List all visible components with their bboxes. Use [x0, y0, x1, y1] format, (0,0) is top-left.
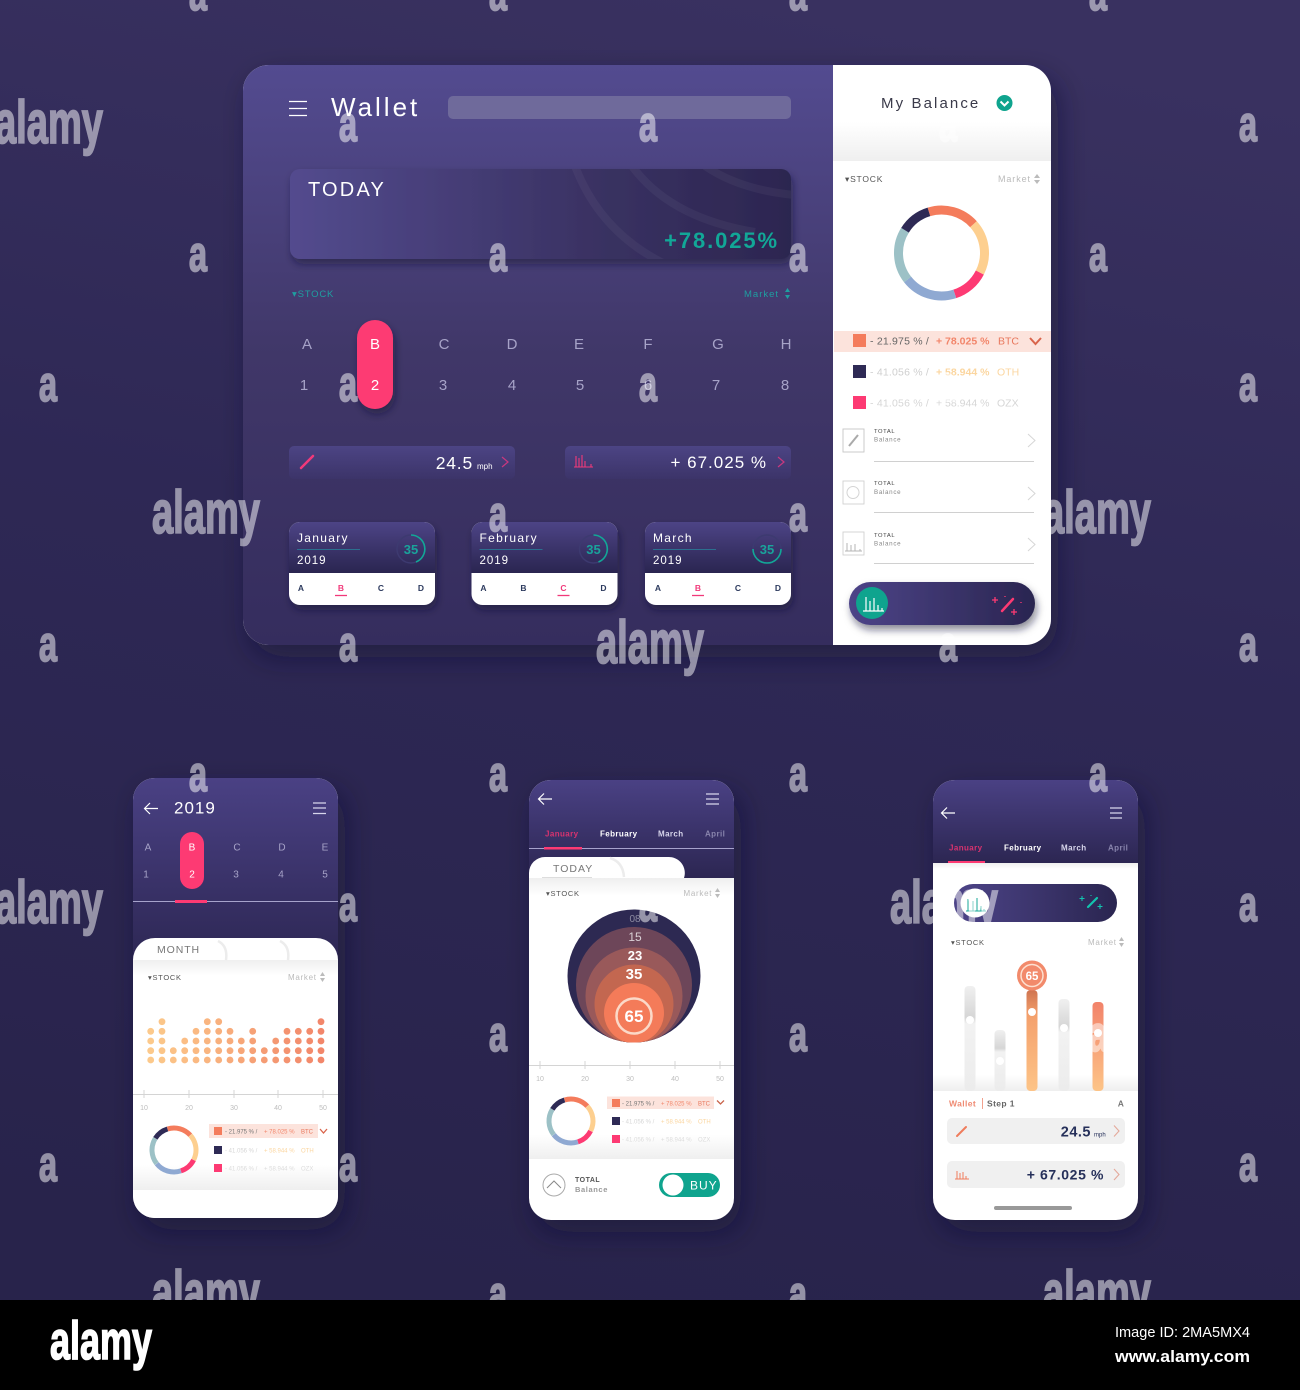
radial stacked chart: 35 — [626, 966, 642, 983]
watermark overlay: alamy — [152, 1259, 260, 1326]
watermark overlay: a — [789, 486, 808, 542]
month card: March: 35 — [760, 542, 774, 557]
tab divider — [529, 848, 734, 850]
tab active marker — [175, 900, 207, 903]
image id: Image ID: 2MA5MX4 — [1115, 1324, 1250, 1341]
card top fade — [133, 960, 338, 976]
watermark overlay: a — [789, 746, 808, 802]
month card: January: B — [338, 583, 344, 593]
chart base fade — [933, 1075, 1138, 1091]
title: Wallet: Wallet — [331, 92, 420, 122]
mini legend: + 58.944 % — [264, 1148, 295, 1154]
mini legend: + 78.025 % — [264, 1130, 295, 1136]
year heading: 2019 — [174, 798, 216, 818]
watermark overlay: alamy — [0, 89, 103, 156]
wallet step label: A — [1118, 1098, 1124, 1108]
calendar letters and numbers: 2 — [371, 377, 379, 394]
calendar letters: 3 — [233, 870, 239, 880]
phone 2: today radial chart — [529, 780, 734, 1220]
mini legend: - 41.056 % / — [622, 1120, 655, 1126]
radial stacked chart: 23 — [628, 948, 642, 963]
icon: menu — [1110, 808, 1122, 818]
wallet step label — [949, 1098, 1124, 1109]
heading: My Balance: My Balance — [881, 95, 980, 112]
card top fade — [529, 878, 734, 896]
axis: 40 — [671, 1076, 679, 1083]
mini legend: + 78.025 % — [661, 1102, 692, 1108]
legend: currency rows: - 41.056 % / — [870, 398, 929, 410]
mini legend: - 21.975 % / — [225, 1130, 258, 1136]
phone 1 body — [133, 778, 338, 1218]
market label: Market — [684, 889, 712, 898]
legend: currency rows: + 58.944 % — [936, 366, 990, 378]
watermark overlay: a — [1239, 356, 1258, 412]
watermark overlay: a — [1239, 876, 1258, 932]
calendar letters and numbers: 8 — [781, 377, 789, 394]
axis: 10 — [140, 1105, 148, 1112]
month card: January: 2019 — [297, 555, 327, 567]
month card: February: D — [600, 583, 607, 593]
watermark overlay: a — [39, 616, 58, 672]
icon: hamburger menu — [289, 102, 307, 116]
month card: March: B — [695, 583, 701, 593]
market label grey: Market — [998, 174, 1031, 184]
month card: March: C — [735, 583, 741, 593]
watermark overlay: alamy — [1043, 1259, 1151, 1326]
legend: currency rows: OTH — [997, 366, 1019, 378]
mini legend: + 58.944 % — [661, 1120, 692, 1126]
calendar letters and numbers: C — [439, 336, 450, 353]
month tabs: February — [600, 830, 638, 838]
stat row: percent: + 67.025 % — [1027, 1166, 1104, 1182]
mini donut — [540, 1090, 602, 1152]
calendar letters and numbers: 5 — [576, 377, 584, 394]
bar chart — [964, 960, 1104, 1091]
month tabs: February — [1004, 844, 1042, 852]
axis: 50 — [319, 1105, 327, 1112]
tab active marker — [544, 847, 582, 850]
watermark overlay: a — [789, 1266, 808, 1322]
month card: March: March — [653, 531, 693, 545]
legend: currency rows: + 58.944 % — [936, 398, 989, 410]
month card: February: 35 — [586, 542, 601, 557]
phone 3: bar chart — [933, 780, 1138, 1220]
market label: Market — [744, 289, 779, 300]
axis — [529, 1061, 734, 1083]
mini legend — [607, 1096, 724, 1144]
watermark overlay: a — [339, 1136, 358, 1192]
icon: back arrow — [942, 808, 955, 818]
calendar letters and numbers: 7 — [712, 377, 720, 394]
list row: total balance 2 — [843, 481, 1035, 512]
calendar letters: 2 — [189, 870, 195, 880]
axis — [133, 1090, 338, 1112]
icon: menu — [706, 794, 719, 804]
watermark overlay: a — [339, 616, 358, 672]
legend: currency rows: OZX — [997, 398, 1019, 410]
slider control — [954, 884, 1117, 922]
mini legend: BTC — [301, 1130, 314, 1136]
legend: currency rows: BTC — [998, 336, 1019, 348]
dashboard base shadow — [243, 65, 1051, 645]
watermark overlay: a — [489, 746, 508, 802]
radial stacked chart: 08 — [629, 914, 641, 925]
stat bar: speed — [289, 446, 515, 479]
icon: menu — [313, 803, 326, 814]
legend: currency rows: - 41.056 % / — [870, 366, 929, 378]
market label — [288, 972, 325, 982]
stock label: ▾STOCK — [951, 938, 985, 947]
market label — [744, 288, 790, 300]
month tabs: MONTH — [157, 944, 200, 956]
watermark overlay: a — [1089, 226, 1108, 282]
watermark overlay: a — [639, 356, 658, 412]
mini legend: OZX — [301, 1166, 313, 1172]
watermark overlay: a — [1089, 1006, 1108, 1062]
tab active marker — [948, 861, 985, 864]
phone 1 header — [133, 778, 338, 968]
list row: total balance 1: TOTAL — [874, 429, 895, 435]
month tabs: April — [705, 830, 725, 838]
search bar — [448, 96, 791, 119]
list row: total balance 3 — [843, 532, 1035, 564]
stat row: speed: mph — [1094, 1132, 1106, 1138]
month card: February: 2019 — [480, 555, 509, 567]
mini legend: + 58.944 % — [264, 1166, 295, 1172]
selected pill — [180, 832, 204, 889]
watermark overlay: alamy — [596, 609, 704, 676]
mini legend: BTC — [698, 1102, 711, 1108]
today card — [290, 166, 795, 264]
bottom fade — [133, 1165, 338, 1190]
mini donut — [143, 1119, 205, 1181]
phone 2 body — [529, 780, 734, 1220]
dot matrix chart — [147, 1018, 324, 1063]
calendar letters: 4 — [278, 870, 284, 880]
watermark overlay: a — [339, 876, 358, 932]
stat row: speed — [947, 1118, 1125, 1144]
axis: 40 — [274, 1105, 282, 1112]
month card: January: D — [418, 583, 424, 593]
phone 3 body — [933, 780, 1138, 1220]
month card: January: C — [378, 583, 384, 593]
donut chart — [881, 192, 1002, 314]
mini legend: OTH — [698, 1120, 711, 1126]
month tabs: January — [949, 844, 983, 852]
calendar letters and numbers: E — [574, 336, 584, 353]
calendar letters: B — [189, 842, 196, 854]
footer logo: alamy — [50, 1311, 152, 1371]
list row: total balance 3: Balance — [874, 540, 901, 548]
watermark overlay: a — [789, 226, 808, 282]
wallet step label: Step 1 — [987, 1098, 1015, 1108]
calendar letters: A — [145, 842, 152, 854]
icon: chevron up circle — [543, 1174, 565, 1196]
month card: February — [472, 522, 618, 605]
month card: February: B — [520, 583, 527, 593]
list row: total balance 3: TOTAL — [874, 533, 895, 539]
header bottom fade — [933, 863, 1138, 869]
list row: total balance 1 — [843, 429, 1035, 462]
watermark overlay: alamy — [0, 869, 103, 936]
phone 1: 2019 calendar — [133, 778, 338, 1218]
total balance label — [575, 1177, 608, 1194]
phone 1 white card — [133, 938, 338, 1218]
watermark overlay: a — [39, 356, 58, 412]
calendar letters and numbers: F — [643, 336, 653, 353]
month card: January — [289, 522, 435, 605]
website: www.alamy.com — [1114, 1347, 1250, 1366]
mini legend — [209, 1124, 327, 1172]
mini legend: - 41.056 % / — [622, 1138, 655, 1144]
stock label: ▾STOCK — [292, 289, 334, 300]
stat bar: speed: 24.5 — [436, 453, 473, 473]
mini legend: - 41.056 % / — [225, 1148, 258, 1154]
stat bar: speed: mph — [477, 462, 493, 471]
watermark overlay: a — [189, 226, 208, 282]
stat row: percent — [947, 1161, 1125, 1188]
watermark overlay: a — [339, 356, 358, 412]
today card: TODAY — [308, 179, 386, 201]
month card: February: C — [560, 583, 567, 593]
watermark overlay: a — [1239, 96, 1258, 152]
calendar letters and numbers: A — [302, 336, 312, 353]
tab label today: TODAY — [553, 863, 593, 875]
month tabs — [157, 941, 288, 960]
calendar letters and numbers: H — [781, 336, 791, 353]
calendar letters and numbers: 1 — [300, 377, 308, 394]
calendar letters: E — [322, 842, 329, 854]
list row: total balance 1: Balance — [874, 436, 901, 444]
month card: March: A — [655, 583, 661, 593]
total balance label: Balance — [575, 1185, 608, 1194]
month tabs: April — [1108, 844, 1128, 852]
icon: check badge — [996, 95, 1012, 111]
slider button — [849, 582, 1035, 625]
calendar letters — [143, 842, 329, 880]
phone 3 header — [933, 780, 1138, 863]
calendar letters and numbers: 6 — [644, 377, 652, 394]
watermark overlay: a — [489, 1006, 508, 1062]
mini legend: OTH — [301, 1148, 314, 1154]
axis: 30 — [626, 1076, 634, 1083]
watermark overlay: a — [639, 96, 658, 152]
market label: Market — [1088, 938, 1117, 947]
axis: 50 — [716, 1076, 724, 1083]
stock label: ▾STOCK — [546, 889, 580, 898]
legend: currency rows — [834, 331, 1051, 410]
calendar letters and numbers: 3 — [439, 377, 447, 394]
watermark overlay: a — [789, 1006, 808, 1062]
watermark overlay: a — [939, 356, 958, 412]
calendar letters and numbers: G — [712, 336, 724, 353]
bar chart: 65 — [1026, 971, 1039, 983]
calendar letters: C — [233, 842, 241, 854]
home indicator — [994, 1206, 1072, 1210]
month card: January: 35 — [404, 542, 418, 557]
calendar letters and numbers: D — [507, 336, 518, 353]
wallet step label: Wallet — [949, 1098, 976, 1108]
month card: March: D — [775, 583, 781, 593]
month tabs: March — [1061, 844, 1087, 852]
radial stacked chart: 65 — [625, 1007, 643, 1026]
month tabs: January — [545, 830, 579, 838]
month card: March: 2019 — [653, 555, 683, 567]
month card: February: A — [480, 583, 487, 593]
balance header fade band — [833, 122, 1051, 161]
calendar letters and numbers: 4 — [508, 377, 516, 394]
today card: +78.025% — [664, 228, 779, 253]
dashboard left panel — [243, 65, 833, 645]
watermark overlay: a — [639, 876, 658, 932]
bottom fade — [529, 1135, 734, 1159]
buy toggle: BUY — [690, 1178, 718, 1192]
watermark overlay: a — [339, 96, 358, 152]
watermark overlay: alamy — [1043, 479, 1151, 546]
stock label dark: ▾STOCK — [845, 174, 883, 184]
mini legend: + 58.944 % — [661, 1138, 692, 1144]
white tab panel — [529, 857, 685, 880]
calendar letters: D — [278, 842, 286, 854]
icon: back arrow — [144, 803, 158, 814]
mini legend: - 21.975 % / — [622, 1102, 655, 1108]
mini legend: OZX — [698, 1138, 710, 1144]
watermark overlay: a — [1089, 746, 1108, 802]
phone 2 header — [529, 780, 734, 878]
icon: back arrow — [538, 794, 552, 804]
axis: 20 — [185, 1105, 193, 1112]
footer bar — [0, 1300, 1300, 1390]
watermark overlay: a — [939, 616, 958, 672]
list row: total balance 2: Balance — [874, 489, 901, 496]
month card: January: A — [298, 583, 304, 593]
watermark overlay: a — [939, 96, 958, 152]
watermark overlay: a — [489, 226, 508, 282]
stat row: speed: 24.5 — [1061, 1124, 1091, 1140]
month tabs — [949, 844, 1128, 852]
watermark overlay: a — [489, 1266, 508, 1322]
market label: Market — [288, 973, 317, 982]
month card: February: February — [480, 531, 538, 545]
tab divider — [133, 900, 338, 902]
calendar letters and numbers: B — [370, 336, 380, 353]
watermark overlay: a — [489, 486, 508, 542]
stat bar: percent — [565, 446, 791, 479]
calendar letters: 5 — [322, 870, 328, 880]
month tabs: March — [658, 830, 684, 838]
watermark overlay: alamy — [890, 869, 998, 936]
stock label: ▾STOCK — [148, 973, 182, 982]
month tabs — [545, 830, 725, 838]
buy toggle — [659, 1173, 720, 1197]
month card: March — [645, 522, 791, 605]
watermark overlay: a — [39, 1136, 58, 1192]
watermark overlay: a — [1239, 1136, 1258, 1192]
panel: desktop wallet dashboard — [243, 65, 1051, 645]
stat bar: percent: + 67.025 % — [670, 453, 767, 472]
watermark overlay: a — [189, 746, 208, 802]
total balance label: TOTAL — [575, 1177, 600, 1184]
axis: 20 — [581, 1076, 589, 1083]
radial stacked chart — [568, 910, 700, 1044]
axis: 10 — [536, 1076, 544, 1083]
radial stacked chart: 15 — [628, 930, 642, 944]
month card: January: January — [297, 531, 349, 545]
legend: currency rows: - 21.975 % / — [870, 336, 929, 348]
watermark overlay: a — [1239, 616, 1258, 672]
legend: currency rows: + 78.025 % — [936, 336, 990, 348]
calendar letters: 1 — [143, 870, 149, 880]
calendar letters and numbers — [300, 336, 791, 394]
list row: total balance 2: TOTAL — [874, 481, 895, 487]
watermark overlay: alamy — [152, 479, 260, 546]
pink selected column pill — [357, 320, 393, 409]
axis: 30 — [230, 1105, 238, 1112]
tab label today — [542, 858, 624, 878]
mini legend: - 41.056 % / — [225, 1166, 258, 1172]
